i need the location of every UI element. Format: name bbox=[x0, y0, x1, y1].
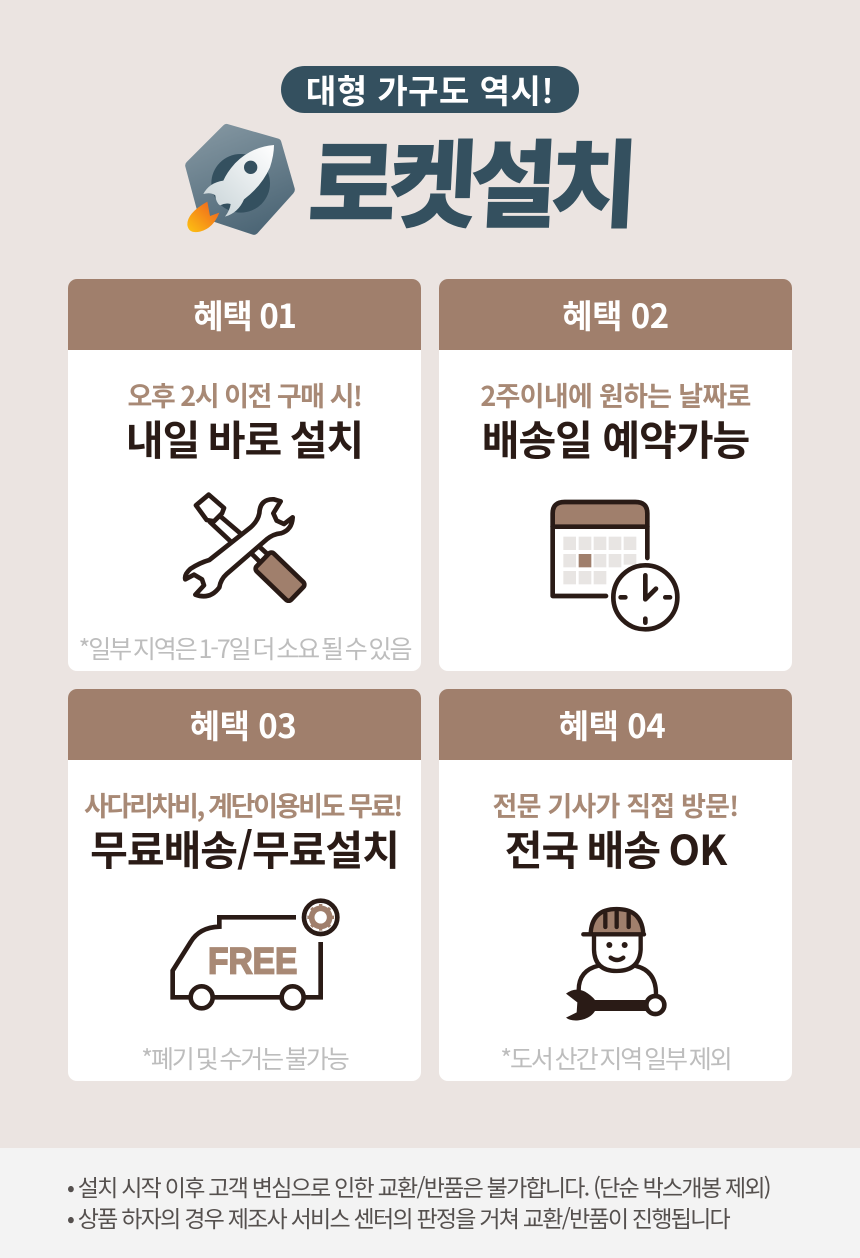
panel: footer notice bbox=[0, 1148, 860, 1258]
subheading: 오후 2시 이전 구매 시! bbox=[128, 375, 361, 414]
icon: free van bbox=[170, 898, 340, 1011]
panel: benefit 02 bbox=[439, 279, 792, 671]
heading: 혜택 02 bbox=[439, 279, 792, 350]
notice line 2: • 상품 하자의 경우 제조사 서비스 센터의 판정을 거쳐 교환/반품이 진행됩니다 bbox=[67, 1200, 729, 1234]
heading: 혜택 03: 혜택 03 bbox=[190, 700, 296, 748]
main text: 무료배송/무료설치 bbox=[90, 817, 399, 877]
heading: 혜택 02: 혜택 02 bbox=[562, 290, 669, 338]
icon: worker with wrench bbox=[566, 906, 667, 1020]
heading: 혜택 01: 혜택 01 bbox=[193, 290, 296, 338]
subheading: 사다리차비, 계단이용비도 무료! bbox=[84, 785, 401, 824]
icon: calendar and clock bbox=[550, 500, 680, 632]
footnote: *일부 지역은 1-7일 더 소요 될 수 있음 bbox=[79, 630, 410, 666]
main text: 내일 바로 설치 bbox=[126, 407, 363, 467]
footnote: *도서 산간 지역 일부 제외 bbox=[500, 1040, 731, 1076]
panel: benefit 01 bbox=[68, 279, 421, 671]
title: 로켓설치 bbox=[305, 109, 635, 248]
heading: 혜택 01 bbox=[68, 279, 421, 350]
heading: 혜택 04: 혜택 04 bbox=[559, 700, 665, 748]
heading: 혜택 04 bbox=[439, 689, 792, 760]
panel: benefit 03 bbox=[68, 689, 421, 1081]
icon: tools bbox=[182, 492, 307, 603]
text: FREE: FREE bbox=[208, 939, 297, 981]
main text: 배송일 예약가능 bbox=[482, 407, 749, 467]
main text: 전국 배송 OK bbox=[505, 817, 726, 877]
top pill badge: 대형 가구도 역시! bbox=[306, 65, 554, 113]
icon: rocket hexagon bbox=[185, 124, 295, 235]
notice line 1: • 설치 시작 이후 고객 변심으로 인한 교환/반품은 불가합니다. (단순 박스개봉 제외) bbox=[67, 1169, 770, 1203]
subheading: 전문 기사가 직접 방문! bbox=[493, 785, 738, 824]
subheading: 2주이내에 원하는 날짜로 bbox=[480, 375, 751, 414]
footnote: *폐기 및 수거는 불가능 bbox=[141, 1040, 348, 1076]
heading: 혜택 03 bbox=[68, 689, 421, 760]
panel: benefit 04 bbox=[439, 689, 792, 1081]
